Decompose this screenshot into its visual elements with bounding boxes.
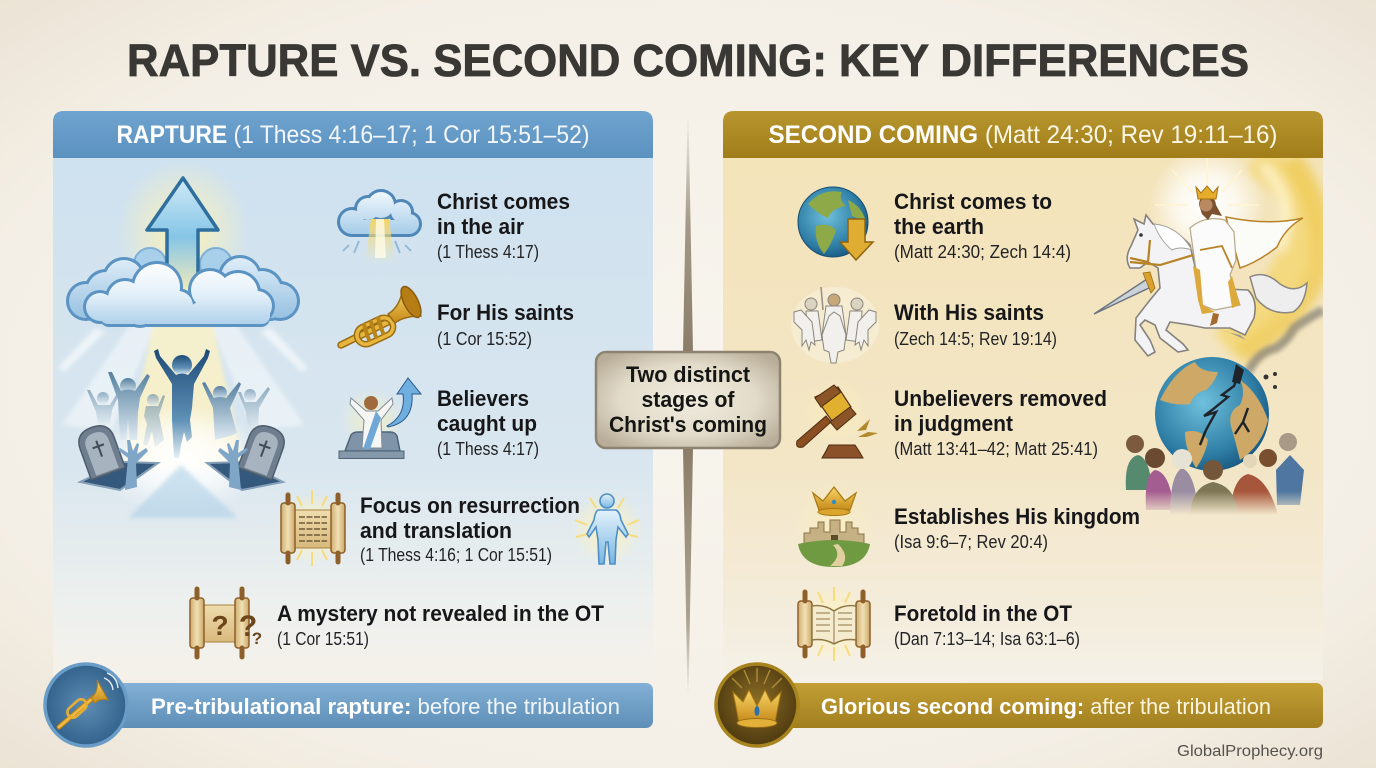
- second coming header: [723, 111, 1323, 158]
- illustration: rising saints and clouds: [58, 160, 308, 518]
- item: Christ comes to the earth: the earth: [894, 214, 984, 239]
- item: Believers caught up: (1 Thess 4:17): [437, 439, 539, 459]
- icon: mystery scroll: [190, 589, 262, 657]
- rider cape: [1226, 217, 1303, 268]
- center divider: [683, 115, 693, 695]
- item: For His saints: (1 Cor 15:52): [437, 329, 532, 349]
- center callout: Christ's coming: [609, 412, 767, 437]
- item: A mystery not revealed: A mystery not revealed in the OT: [277, 601, 605, 626]
- icon: mystery scroll: ?: [239, 610, 257, 643]
- banner: glorious second coming: [716, 664, 1323, 746]
- item: A mystery not revealed: [190, 589, 605, 657]
- icon: figure ascending: [339, 378, 421, 458]
- icon: open book scroll: [796, 586, 872, 662]
- item: Christ comes to the earth: Christ comes to: [894, 189, 1052, 214]
- item: Focus on resurrection and translation: Focus on resurrection: [360, 493, 580, 518]
- item: For His saints: [341, 284, 574, 349]
- icon: crown over castle: [792, 483, 876, 567]
- item: Christ comes in the air: Christ comes: [437, 189, 570, 214]
- item: Unbelievers removed in judgment: Unbelievers removed: [894, 386, 1107, 411]
- item: With His saints: With His saints: [894, 300, 1044, 325]
- icon: glorified body: [571, 492, 643, 564]
- item: For His saints: For His saints: [437, 300, 574, 325]
- icon: crown medallion: [716, 664, 798, 746]
- second coming header: SECOND COMING (Matt 24:30; Rev 19:11–16): [768, 121, 1278, 149]
- title: RAPTURE VS. SECOND COMING: KEY DIFFERENCES: [127, 35, 1249, 86]
- sword: [1094, 279, 1151, 314]
- item: Unbelievers removed in judgment: (Matt 13:41–42; Matt 25:41): [894, 439, 1098, 459]
- icon: mystery scroll: ?: [252, 629, 262, 648]
- center callout: stages of: [642, 387, 735, 412]
- item: Establishes His kingdom: [792, 483, 1140, 567]
- rapture header: [53, 111, 653, 158]
- icon: cloud with light: [337, 189, 422, 264]
- main figure: [154, 349, 210, 458]
- banner: glorious second coming: Glorious second coming: after the tribulation: [821, 694, 1271, 719]
- rapture header: RAPTURE (1 Thess 4:16–17; 1 Cor 15:51–52): [116, 121, 590, 149]
- item: A mystery not revealed: (1 Cor 15:51): [277, 629, 369, 649]
- icon: globe with arrow: [798, 187, 873, 260]
- panel: rapture: [53, 111, 653, 680]
- icon: trumpet medallion: [45, 664, 127, 746]
- upward arrow: [147, 178, 218, 296]
- halo: [1154, 158, 1260, 253]
- item: Christ comes in the air: in the air: [437, 214, 524, 239]
- icon: gavel: [797, 378, 878, 458]
- item: Christ comes to the earth: (Matt 24:30; Zech 14:4): [894, 242, 1071, 262]
- item: Unbelievers removed in judgment: in judgment: [894, 411, 1014, 436]
- side figures: [87, 387, 270, 447]
- icon: riders on white horses: [791, 287, 879, 363]
- back clouds: [66, 255, 300, 324]
- item: Foretold in the OT: (Dan 7:13–14; Isa 63:1–6): [894, 629, 1080, 649]
- banner: pre-tribulational rapture: [45, 664, 653, 746]
- item: Believers caught up: Believers: [437, 386, 529, 411]
- head and hair: [1199, 200, 1222, 220]
- people: [1126, 433, 1304, 515]
- item: Christ comes to the earth: [798, 187, 1071, 262]
- light rays: [58, 325, 308, 470]
- tail: [1250, 275, 1307, 313]
- item: Focus on resurrection and translation: (1 Thess 4:16; 1 Cor 15:51): [360, 545, 552, 565]
- item: With His saints: [791, 287, 1057, 363]
- item: Unbelievers removed in judgment: [797, 378, 1107, 459]
- right grave: [207, 421, 288, 490]
- illustration: cracked earth and people: [1126, 310, 1323, 515]
- item: Establishes His kingdom: (Isa 9:6–7; Rev 20:4): [894, 532, 1048, 552]
- golden swirl: [1225, 158, 1321, 355]
- rider robe: [1190, 219, 1240, 310]
- center callout: Two distinct: [626, 362, 751, 387]
- item: Foretold in the OT: [796, 586, 1080, 662]
- panel: second coming: [723, 111, 1323, 680]
- footer credit: GlobalProphecy.org: [1177, 743, 1323, 760]
- center callout: [596, 352, 780, 448]
- item: Believers caught up: caught up: [437, 411, 537, 436]
- item: Foretold in the OT: Foretold in the OT: [894, 601, 1073, 626]
- item: With His saints: (Zech 14:5; Rev 19:14): [894, 329, 1057, 349]
- front clouds: [83, 261, 275, 328]
- icon: mystery scroll: ?: [211, 610, 229, 641]
- left grave: [75, 421, 158, 490]
- smoke: [1248, 310, 1323, 372]
- crown: [1196, 186, 1218, 199]
- item: Christ comes in the air: (1 Thess 4:17): [437, 242, 539, 262]
- item: Christ comes in the air: [337, 189, 570, 264]
- item: Establishes His kingdom: Establishes His kingdom: [894, 504, 1140, 529]
- illustration: rider on white horse: [1094, 147, 1321, 356]
- item: Focus on resurrection and translation: [276, 490, 643, 566]
- horse: [1127, 215, 1255, 356]
- back cloud caps: [134, 247, 232, 270]
- globe: [1155, 357, 1269, 471]
- icon: scroll: [276, 490, 348, 566]
- item: Focus on resurrection and translation: and translation: [360, 518, 512, 543]
- banner: pre-tribulational rapture: Pre-tribulational rapture: before the tribulation: [151, 694, 620, 719]
- item: Believers caught up: [339, 378, 539, 459]
- icon: trumpet: [341, 284, 425, 347]
